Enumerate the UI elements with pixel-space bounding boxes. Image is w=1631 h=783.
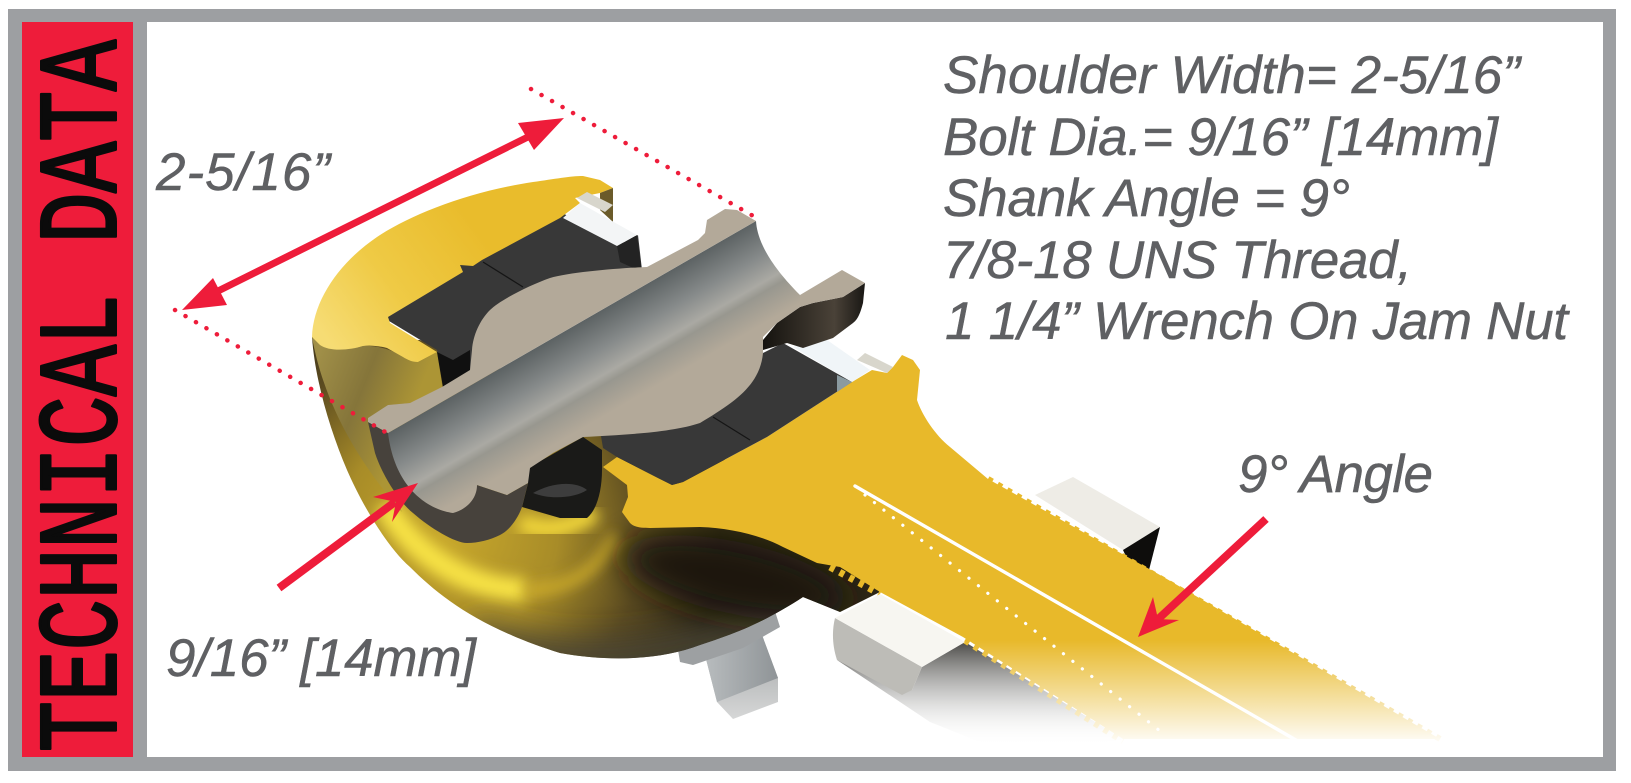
specification text: Shoulder Width= 2-5/16” bbox=[943, 46, 1522, 105]
red title bar bbox=[22, 22, 150, 757]
threaded shank bbox=[603, 355, 1440, 747]
sleeve end wall bbox=[368, 422, 528, 543]
specification text: Shank Angle = 9° bbox=[943, 169, 1350, 228]
sleeve tan section upper bbox=[368, 209, 756, 433]
arrow: shoulder width bbox=[182, 118, 564, 310]
bushing underside bbox=[522, 437, 602, 518]
label: bolt diameter: 9/16” [14mm] bbox=[166, 629, 477, 688]
grease fitting bbox=[678, 605, 780, 719]
gold upper cut face bbox=[312, 176, 613, 362]
dimension guide lines bbox=[175, 89, 755, 433]
lower washer bbox=[793, 340, 893, 392]
specification text bbox=[943, 46, 1570, 351]
arrow: bolt diameter bbox=[279, 483, 418, 588]
specification text: 7/8-18 UNS Thread, bbox=[943, 231, 1412, 290]
specification text: 1 1/4” Wrench On Jam Nut bbox=[945, 292, 1570, 351]
pitch line bbox=[865, 495, 1165, 735]
sleeve right flange bbox=[800, 270, 865, 307]
lower jam nut bbox=[833, 594, 965, 695]
upper thread teeth bbox=[988, 479, 1440, 739]
sleeve bore and lower section bbox=[388, 221, 800, 513]
label: shoulder width: 2-5/16” bbox=[155, 143, 332, 202]
lower bushing bbox=[600, 343, 852, 485]
lower thread teeth bbox=[830, 567, 880, 594]
yoke bowl bbox=[312, 337, 880, 658]
back jam nut bbox=[1035, 477, 1160, 570]
interior wall of yoke bbox=[312, 337, 443, 512]
right flange underside bbox=[763, 283, 865, 350]
shaded shaft below jam nut bbox=[837, 642, 1123, 750]
fade out at bottom bbox=[815, 640, 1595, 752]
label: angle: 9° Angle bbox=[1238, 445, 1433, 504]
upper washer bbox=[563, 192, 637, 246]
arrow: nine degree angle bbox=[1138, 519, 1266, 637]
upper bushing bbox=[384, 212, 642, 387]
gold rim side bbox=[600, 188, 613, 222]
specification text: Bolt Dia.= 9/16” [14mm] bbox=[943, 108, 1499, 167]
cutaway rod end bbox=[312, 176, 1442, 742]
centre line bbox=[855, 486, 1308, 747]
